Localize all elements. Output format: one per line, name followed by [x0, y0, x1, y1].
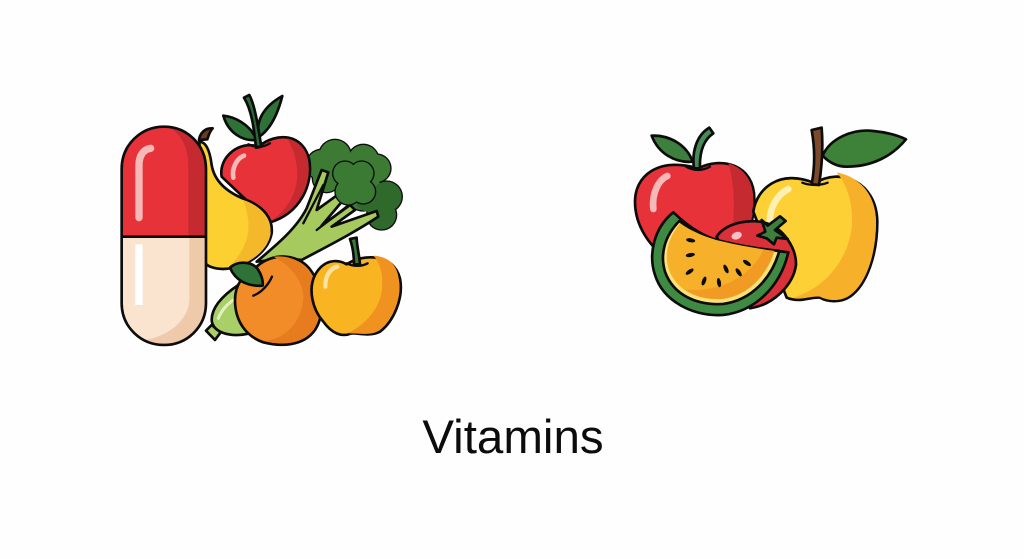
icon: zucchini: [206, 285, 250, 340]
icon: orange with leaf: [230, 256, 322, 345]
title: Vitamins: [422, 411, 604, 464]
icon: red apple: [635, 128, 754, 247]
icon: broccoli: [257, 139, 403, 262]
icon: capsule pill: [122, 127, 206, 345]
seeds: [685, 238, 752, 288]
icon: red apple with leaves: [221, 95, 310, 222]
icon: watermelon slice: [652, 212, 788, 315]
icon: golden apple: [312, 238, 401, 335]
icon: tomato: [717, 216, 796, 308]
icon: yellow pear: [199, 128, 272, 269]
illustration: fruit group with apples, tomato and melon slice: [635, 128, 906, 315]
icon: yellow apple with leaf: [753, 128, 906, 301]
illustration: vitamin capsule with fruit and vegetables: [122, 95, 403, 345]
